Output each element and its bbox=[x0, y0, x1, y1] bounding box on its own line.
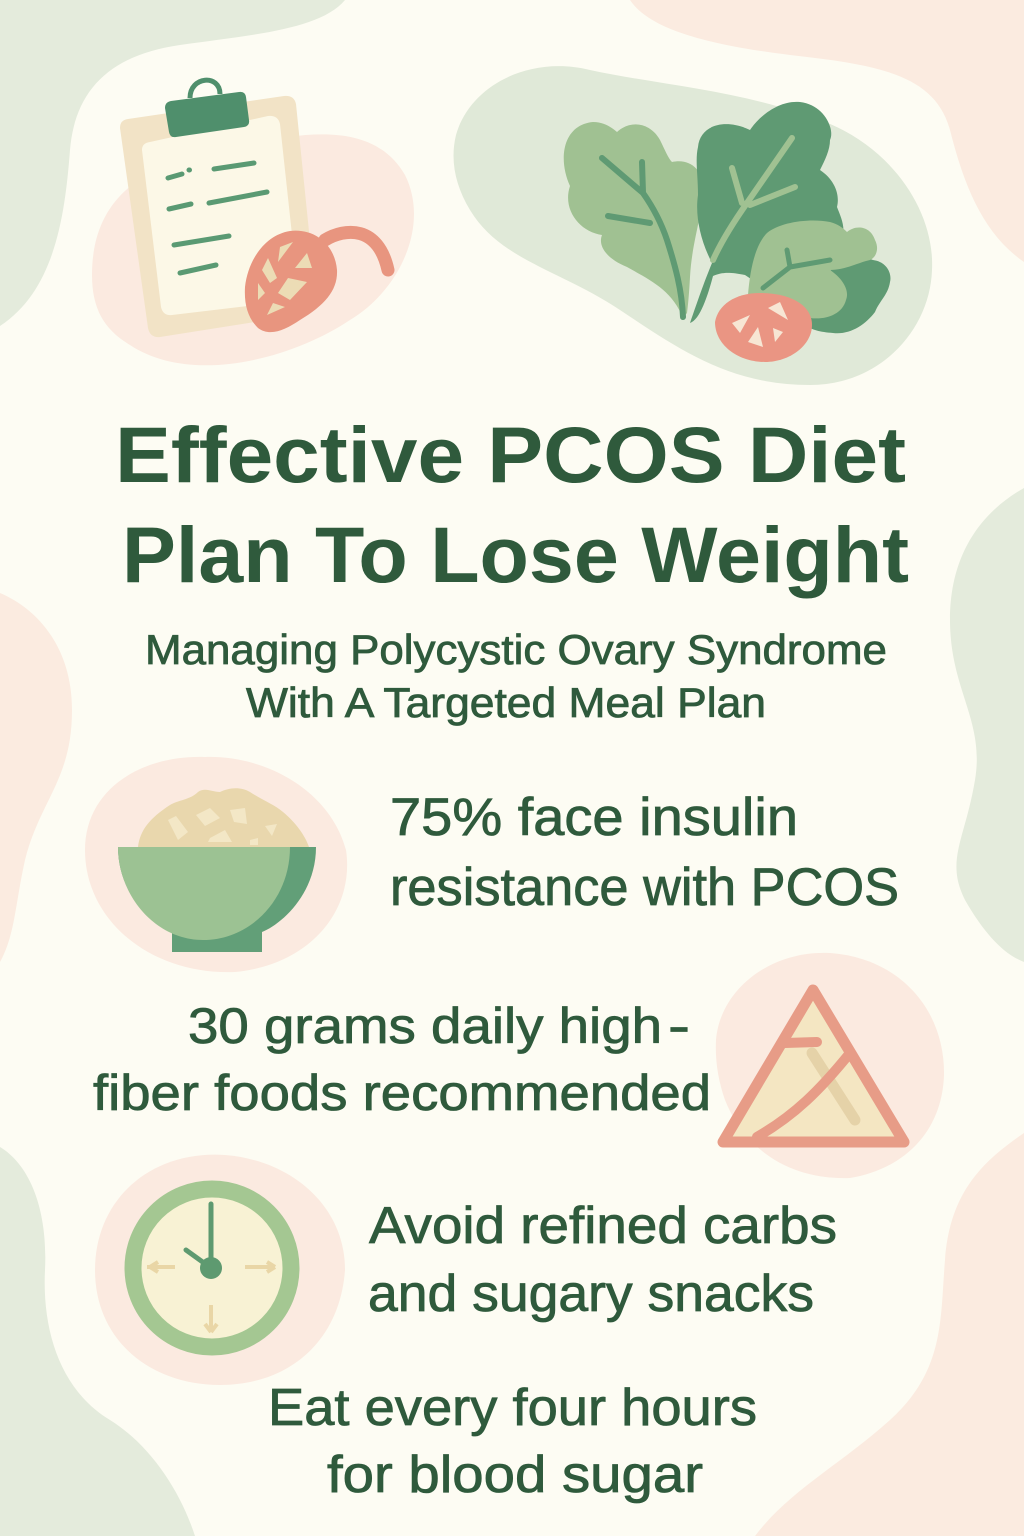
stat: refined carbs: Avoid refined carbs bbox=[369, 1197, 837, 1255]
stat: insulin resistance bbox=[390, 788, 899, 917]
title: Plan To Lose Weight bbox=[122, 510, 909, 599]
stat: refined carbs: and sugary snacks bbox=[368, 1265, 814, 1323]
title bbox=[115, 410, 909, 599]
icon: clock bbox=[95, 1155, 345, 1385]
icon: bowl of oats bbox=[85, 757, 347, 972]
subtitle: Managing Polycystic Ovary Syndrome bbox=[145, 626, 887, 673]
stat: insulin resistance: 75% face insulin bbox=[390, 788, 798, 847]
subtitle bbox=[145, 626, 887, 726]
subtitle: With A Targeted Meal Plan bbox=[246, 679, 766, 726]
stat: fiber foods bbox=[93, 998, 711, 1121]
stat: meal timing bbox=[268, 1379, 757, 1504]
stat: insulin resistance: resistance with PCOS bbox=[390, 858, 899, 917]
stat: meal timing: Eat every four hours bbox=[268, 1379, 757, 1437]
stat: fiber foods: 30 grams daily high bbox=[188, 998, 662, 1054]
stat: meal timing: for blood sugar bbox=[327, 1446, 703, 1504]
icon: warning triangle bbox=[716, 953, 944, 1178]
title: Effective PCOS Diet bbox=[115, 410, 906, 499]
stat: refined carbs bbox=[368, 1197, 837, 1323]
stat: fiber foods: - bbox=[668, 998, 690, 1054]
icon: leafy greens with tomato bbox=[454, 66, 932, 385]
icon: clipboard with tomato bbox=[92, 80, 414, 365]
stat: fiber foods: fiber foods recommended bbox=[93, 1065, 711, 1121]
